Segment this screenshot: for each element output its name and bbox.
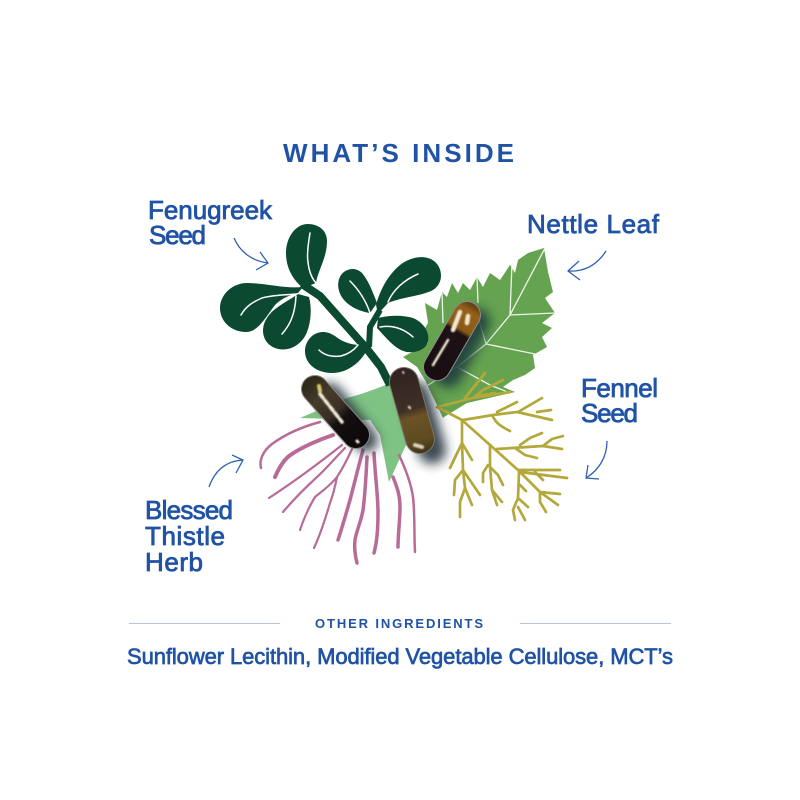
label: Fenugreek Seed: Fenugreek: [148, 195, 273, 225]
label: Fennel Seed: Fennel: [581, 373, 658, 403]
label: Nettle Leaf: Nettle Leaf: [527, 209, 660, 239]
arrow: Fennel: [586, 441, 607, 479]
capsule: brown: [403, 372, 422, 447]
illustration: herbs and capsules: [220, 224, 567, 563]
label: Fenugreek Seed: [148, 195, 273, 250]
ingredient list: Sunflower Lecithin, Modified Vegetable Cellulose, MCT’s: [127, 644, 673, 669]
divider: left: [129, 622, 280, 624]
label: Blessed Thistle Herb: Thistle: [145, 521, 225, 551]
icon: fenugreek leaves: [220, 224, 441, 385]
title: WHAT’S INSIDE: [283, 138, 514, 168]
arrow: Blessed Thistle: [209, 455, 243, 487]
capsule: amber: [433, 312, 468, 367]
icon: nettle leaf: [403, 248, 555, 418]
capsule shadows: [330, 322, 476, 450]
icon: fennel sprig: [437, 373, 567, 520]
arrow: Fenugreek: [234, 238, 268, 270]
subheading: other ingredients: OTHER INGREDIENTS: [315, 616, 483, 631]
icon: thistle flower: [260, 383, 415, 563]
label: Fennel Seed: Seed: [581, 398, 638, 428]
label: Blessed Thistle Herb: Blessed: [145, 495, 233, 525]
divider: right: [520, 622, 671, 624]
label: Blessed Thistle Herb: [145, 495, 233, 577]
capsule: dark with yellow: [315, 386, 358, 442]
label: Fenugreek Seed: Seed: [149, 220, 206, 250]
label: Blessed Thistle Herb: Herb: [145, 547, 203, 577]
label: Fennel Seed: [581, 373, 658, 428]
arrow: Nettle Leaf: [568, 251, 606, 280]
